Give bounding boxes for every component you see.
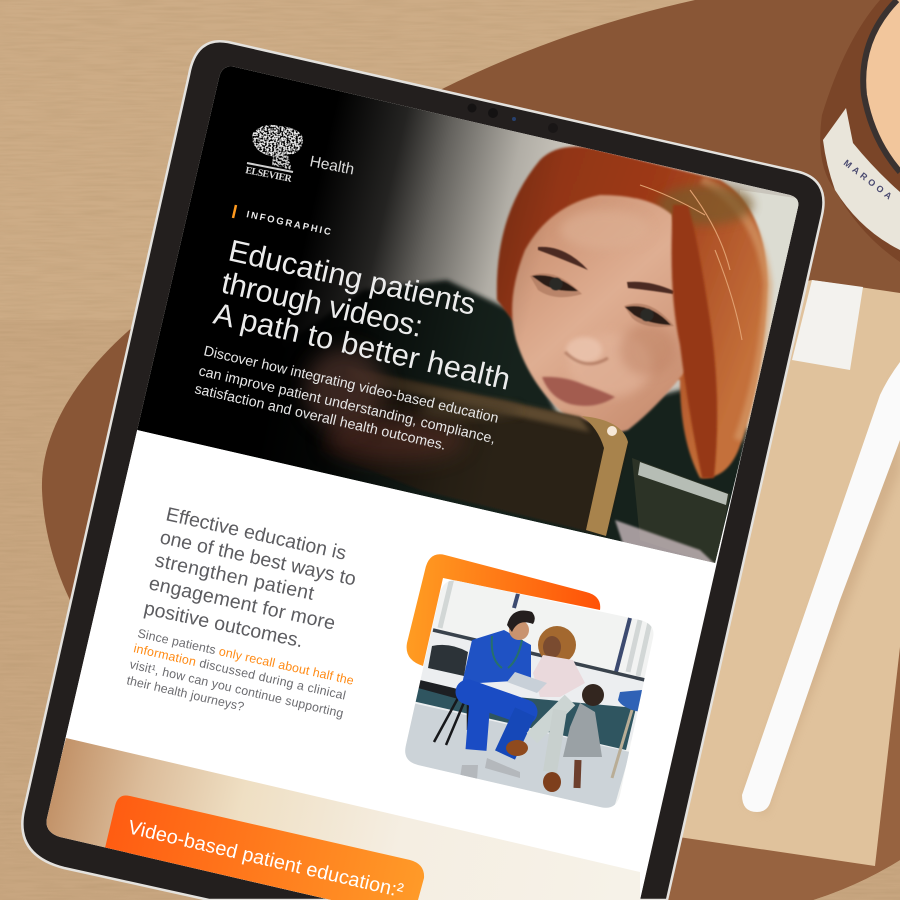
candle jar with label [820,0,900,262]
logo: Elsevier tree: ELSEVIER [244,165,293,185]
candle label [823,108,900,250]
supporting paragraph: visit¹, how can you continue supporting [128,657,345,721]
card heading: Video-based patient education:² [126,816,406,900]
section heading: effective education: one of the best ways to [158,526,358,591]
window blinds [440,578,650,676]
eyebrows [538,247,588,270]
title: Educating patients [225,234,479,322]
eye left [530,273,582,297]
intro paragraph: satisfaction and overall health outcomes. [193,381,447,454]
supporting paragraph: information discussed during a clinical [132,641,347,703]
supporting paragraph [125,626,355,721]
eyebrow: INFOGRAPHIC: INFOGRAPHIC [245,209,332,238]
walls and floor [400,628,660,760]
gradient band [40,738,640,900]
mother [506,626,585,792]
brand label: Health: Health [308,153,356,179]
front camera dots [468,104,558,133]
chair [418,645,468,745]
orange photo frame [407,554,600,666]
hand, blurred in the foreground [305,348,520,462]
nose [565,337,608,364]
sweater [130,280,748,570]
orange tick [233,205,236,218]
section heading: effective education [142,503,358,652]
title [212,240,508,390]
child [563,684,604,788]
white tape [792,280,863,370]
supporting paragraph: their health journeys? [125,673,245,714]
notebook [672,280,900,866]
face [512,195,690,433]
exam table [612,690,642,778]
section heading: effective education: engagement for more [147,572,337,635]
phone [362,372,628,536]
clinic photo: nurse with mother and child [400,575,660,815]
orange card [105,795,424,900]
intro paragraph: can improve patient understanding, compliance, [197,363,497,447]
dark overlay gradient [137,66,552,496]
title: through videos: [218,266,426,344]
white content band [60,430,715,900]
section heading: effective education: Effective education is [164,503,349,565]
lips [542,377,615,406]
candle label: MAROOA [842,158,895,203]
logo: Elsevier tree [244,125,303,185]
sweater cuff [615,458,730,565]
nurse [460,611,535,780]
intro paragraph: Discover how integrating video-based education [202,343,500,427]
tablet screen [40,60,810,900]
title: A path to better health [210,297,513,397]
supporting paragraph: Since patients only recall about half the [136,626,355,688]
hero photo panel: woman looking at phone [130,60,810,570]
section heading: effective education: positive outcomes. [142,597,305,652]
tablet device [507,672,547,693]
hair [497,147,768,478]
hair strand over the face [672,205,717,478]
section heading: effective education: strengthen patient [153,549,317,605]
stylus pen [742,362,900,815]
eye right [624,304,674,327]
